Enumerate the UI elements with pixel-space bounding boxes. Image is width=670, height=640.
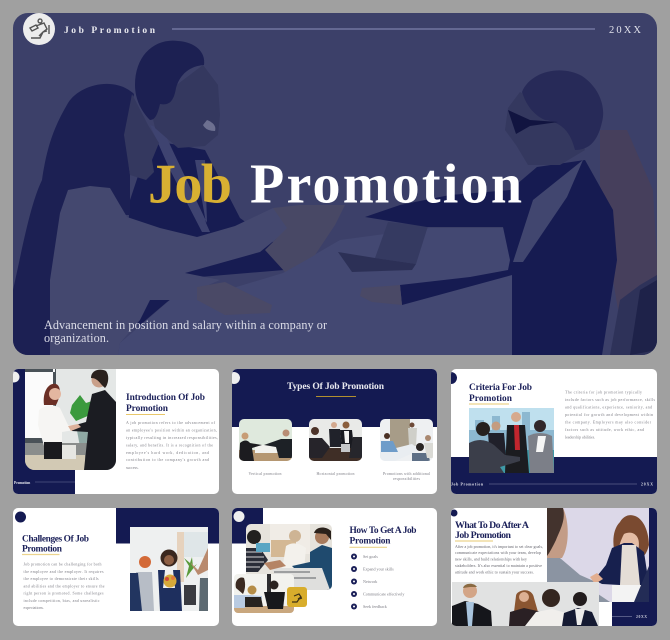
- gold icon tile: [287, 587, 307, 607]
- body text: and qualifications, experience, seniority, and: [565, 406, 652, 410]
- body text: the company. Employers may also consider: [565, 420, 652, 424]
- slide: introduction: [8, 369, 219, 494]
- header label: Job Promotion: [64, 26, 156, 36]
- body text: After a job promotion, it's important to set clear goals,: [455, 545, 543, 550]
- photo: woman with ponytail: [360, 70, 657, 355]
- hero panel: job promotion cover: [13, 13, 657, 355]
- heading: [455, 520, 529, 541]
- body text: Job promotion can be challenging for both: [24, 562, 102, 566]
- body text: [24, 562, 105, 610]
- table: [118, 228, 512, 355]
- body text: stakeholders. It's also essential to maintain a positive: [455, 564, 542, 568]
- slide: what to do after: [450, 508, 657, 626]
- logo: [13, 372, 20, 382]
- photo: horizontal promotion: [309, 419, 362, 461]
- photo: woman in white blazer: [13, 84, 345, 355]
- footer: 20XX: [636, 615, 647, 619]
- heading: Challenges Of Job: [22, 534, 89, 544]
- photo: team applause: [469, 408, 554, 473]
- body text: factors such as attitude, work ethic, and: [565, 428, 644, 433]
- logo: [234, 511, 244, 522]
- slide: challenges: [13, 508, 219, 626]
- body text: The criteria for job promotion typically: [565, 390, 642, 394]
- logo: [232, 372, 240, 384]
- captions: Promotions with additional: [383, 472, 430, 476]
- body text: the employee to demonstrate their skills: [24, 577, 99, 581]
- footer: [612, 615, 647, 619]
- slide: types: [228, 369, 437, 494]
- heading: Introduction Of Job: [126, 393, 205, 403]
- heading: How To Get A Job: [350, 526, 416, 536]
- heading: Promotion: [126, 404, 169, 414]
- body text: leadership abilities.: [565, 436, 595, 440]
- main title: [150, 164, 522, 203]
- body text: [455, 545, 543, 574]
- body text: salary, and benefits. It is a recognition of the: [126, 444, 213, 448]
- step: network: Network: [363, 579, 378, 584]
- captions: Vertical promotion: [248, 472, 282, 476]
- heading: Criteria For Job: [469, 383, 532, 393]
- photo: meeting across desk: [246, 524, 332, 590]
- logo: [451, 372, 457, 384]
- footer: [451, 482, 653, 486]
- logo badge: [23, 13, 55, 45]
- body text: employee's hard work, dedication, and: [126, 451, 209, 456]
- subtitle: organization.: [44, 331, 109, 345]
- photo: interview handshake: [547, 508, 649, 602]
- body text: contribution to the company's growth and: [126, 458, 209, 462]
- footer: Job Promotion: [451, 482, 484, 486]
- body text: include factors such as job performance, skills: [565, 398, 655, 403]
- step: expand skills: Expand your skills: [363, 566, 394, 572]
- step: feedback: Seek feedback: [363, 604, 388, 609]
- body text: typically resulting in increased responsibilities,: [126, 436, 218, 441]
- body text: potential for growth and development within: [565, 413, 653, 417]
- photo: additional responsibilities: [380, 419, 433, 461]
- captions: [248, 472, 430, 481]
- captions: Horizontal promotion: [316, 472, 355, 476]
- heading: [350, 526, 416, 546]
- body text: right person is promoted. Some challenges: [24, 592, 104, 596]
- step: communicate: Communicate effectively: [363, 592, 405, 596]
- header year: 20XX: [609, 25, 641, 36]
- body text: [565, 390, 655, 440]
- heading: [469, 384, 532, 401]
- heading: Promotion: [469, 394, 513, 404]
- body text: A job promotion refers to the advancement of: [126, 421, 216, 425]
- photo: man in suit: [122, 41, 284, 325]
- body text: expectations.: [24, 606, 44, 610]
- body text: the employee and the employer. It requires: [24, 570, 104, 574]
- body text: [126, 421, 218, 470]
- logo: [450, 510, 458, 516]
- heading: Job Promotion: [455, 530, 512, 541]
- step: set goals: Set goals: [363, 554, 378, 559]
- logo: [15, 512, 26, 522]
- list: steps: [351, 554, 405, 610]
- photo: vertical promotion: [239, 419, 292, 461]
- photo: celebration with flowers: [130, 527, 208, 611]
- heading: Types Of Job Promotion: [287, 382, 385, 392]
- photo: handshake in office: [25, 369, 116, 470]
- heading: [126, 394, 205, 411]
- footer label: Promotion: [14, 481, 30, 485]
- subtitle: [44, 320, 327, 344]
- slide: criteria: [445, 369, 657, 494]
- photo: three colleagues: [234, 574, 294, 613]
- body text: communicate expectations with your team, develop: [455, 551, 541, 556]
- body text: success.: [126, 466, 139, 470]
- body text: attitude and work ethic to sustain your success.: [455, 570, 534, 574]
- subtitle: Advancement in position and salary within a company or: [44, 318, 327, 332]
- captions: responsibilities: [393, 477, 420, 481]
- heading: Promotion: [350, 536, 391, 546]
- footer: 20XX: [641, 482, 653, 486]
- main title: Promotion: [250, 154, 522, 216]
- photo: laptop: [338, 228, 427, 272]
- body text: include competition, bias, and unrealistic: [24, 599, 100, 604]
- body text: and abilities and the employer to ensure the: [24, 584, 105, 588]
- photo: interview panel: [452, 582, 599, 626]
- heading: [22, 535, 89, 552]
- body text: an employee's position within an organization,: [126, 428, 217, 434]
- body text: new skills, and build relationships with key: [455, 558, 527, 562]
- heading: Promotion: [22, 544, 63, 554]
- heading: What To Do After A: [455, 520, 529, 531]
- main title: Job: [148, 154, 232, 216]
- slide: how to get: [232, 508, 437, 626]
